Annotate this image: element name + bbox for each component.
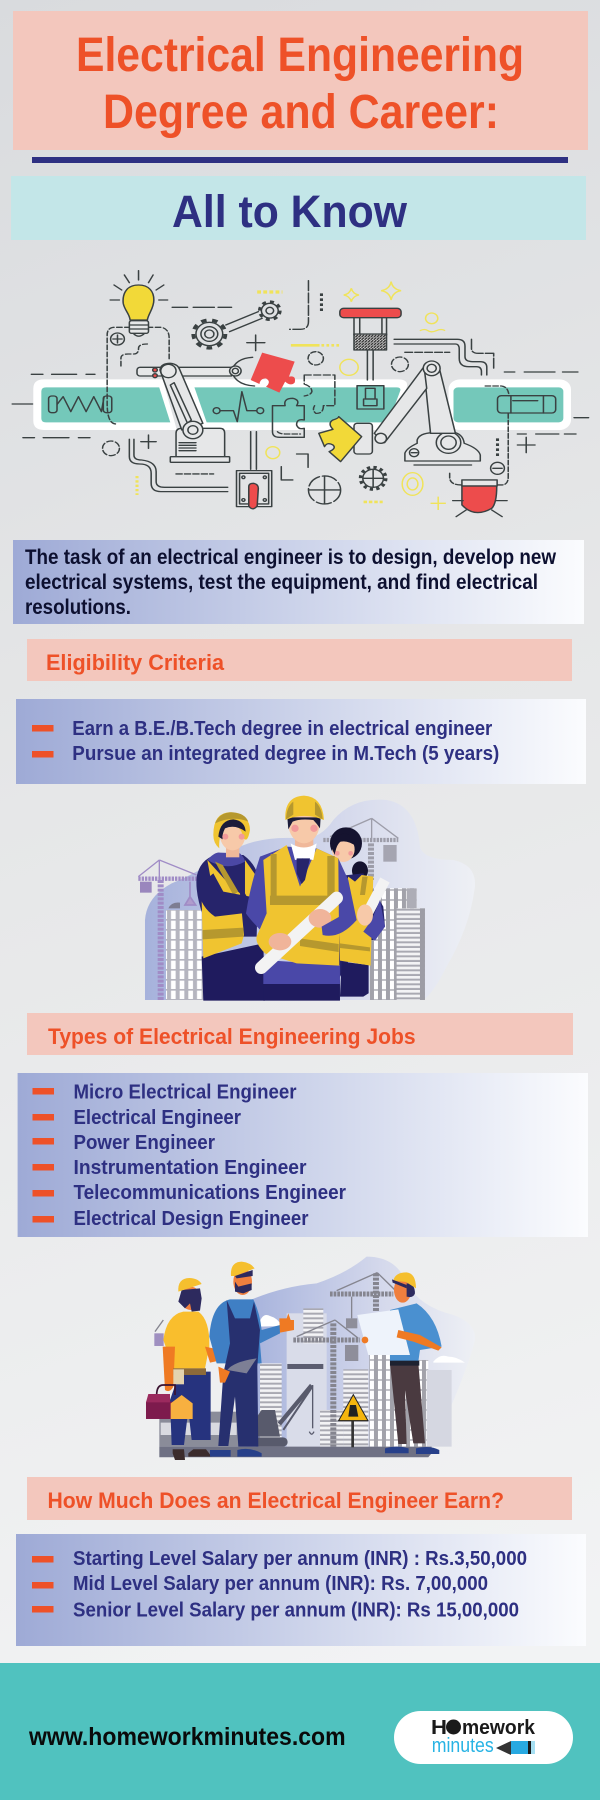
panel: jobs list: Electrical Engineer [74, 1107, 241, 1129]
heading: types of jobs [27, 1013, 573, 1055]
panel: salary list: Starting Level Salary per annum (INR) : Rs.3,50,000 [73, 1548, 527, 1570]
panel: jobs list: Power Engineer [74, 1132, 215, 1154]
background blob and left block [145, 800, 475, 1000]
person: supervisor with blueprint [357, 1272, 442, 1454]
intro text panel [13, 540, 584, 624]
beam [287, 1364, 323, 1369]
icon: left robot arm and red puzzle piece [137, 353, 295, 462]
panel: salary list: Senior Level Salary per annum (INR): Rs 15,00,000 [73, 1600, 519, 1622]
footer band [0, 1663, 600, 1800]
logo: minutes [432, 1735, 494, 1757]
subtitle panel: All to Know [172, 186, 408, 237]
panel: jobs list: Telecommunications Engineer [74, 1182, 346, 1204]
logo: H [431, 1717, 447, 1739]
heading: types of jobs: Types of Electrical Engineering Jobs [48, 1024, 416, 1049]
panel: salary list: Mid Level Salary per annum (INR): Rs. 7,00,000 [73, 1573, 488, 1595]
logo [394, 1711, 573, 1764]
buildings [166, 888, 425, 1000]
person: woman engineer [330, 827, 385, 997]
icon: red alarm lamp [453, 480, 507, 517]
heading: eligibility criteria: Eligibility Criteria [46, 650, 225, 675]
icon: red push button [340, 308, 401, 409]
right crane [323, 818, 398, 880]
ground [159, 1447, 432, 1457]
intro text panel: The task of an electrical engineer is to design, develop new [25, 546, 557, 569]
panel: jobs list: Instrumentation Engineer [74, 1157, 307, 1179]
intro text panel: resolutions. [25, 596, 131, 619]
person: left engineer [196, 812, 265, 1001]
footer band: www.homeworkminutes.com [28, 1723, 346, 1751]
heading: salary [27, 1477, 572, 1520]
panel: eligibility list [16, 699, 586, 784]
panel: jobs list [18, 1073, 588, 1237]
band: white and teal segments [33, 379, 571, 430]
background blob [247, 1257, 475, 1447]
panel: jobs list: Micro Electrical Engineer [74, 1082, 297, 1104]
person: centre engineer [246, 796, 357, 1001]
site buildings [159, 1308, 465, 1447]
icon: light bulb [110, 271, 168, 336]
heading: eligibility criteria [27, 639, 572, 681]
panel: eligibility list: Earn a B.E./B.Tech degree in electrical engineer [72, 718, 492, 740]
line work [12, 281, 589, 504]
excavator [252, 1385, 314, 1447]
illustration: electrical engineering machinery [12, 271, 589, 517]
icon: gears [193, 302, 386, 489]
subtitle panel [11, 176, 586, 240]
heading: salary: How Much Does an Electrical Engineer Earn? [48, 1488, 504, 1513]
warning sign [339, 1395, 368, 1447]
icon: yellow accents [137, 282, 446, 510]
icon: right robot arm and yellow puzzle piece [319, 361, 480, 462]
intro text panel: electrical systems, test the equipment, and find electrical [25, 571, 538, 594]
illustration: construction workers and site [146, 1257, 475, 1460]
person: worker with toolbox [146, 1278, 243, 1460]
title panel: Electrical Engineering [76, 29, 524, 82]
icon: toggle switch [237, 471, 272, 509]
divider bar [32, 157, 568, 163]
left crane [138, 860, 197, 1000]
illustration: three engineers in vests [138, 796, 475, 1001]
cranes [154, 1273, 397, 1447]
title panel [13, 11, 588, 150]
panel: jobs list: Electrical Design Engineer [74, 1208, 309, 1230]
logo: mework [462, 1717, 536, 1739]
title panel: Degree and Career: [103, 86, 499, 139]
panel: salary list [16, 1534, 586, 1646]
person: worker giving thumbs up [209, 1262, 294, 1457]
panel: eligibility list: Pursue an integrated degree in M.Tech (5 years) [72, 743, 499, 765]
